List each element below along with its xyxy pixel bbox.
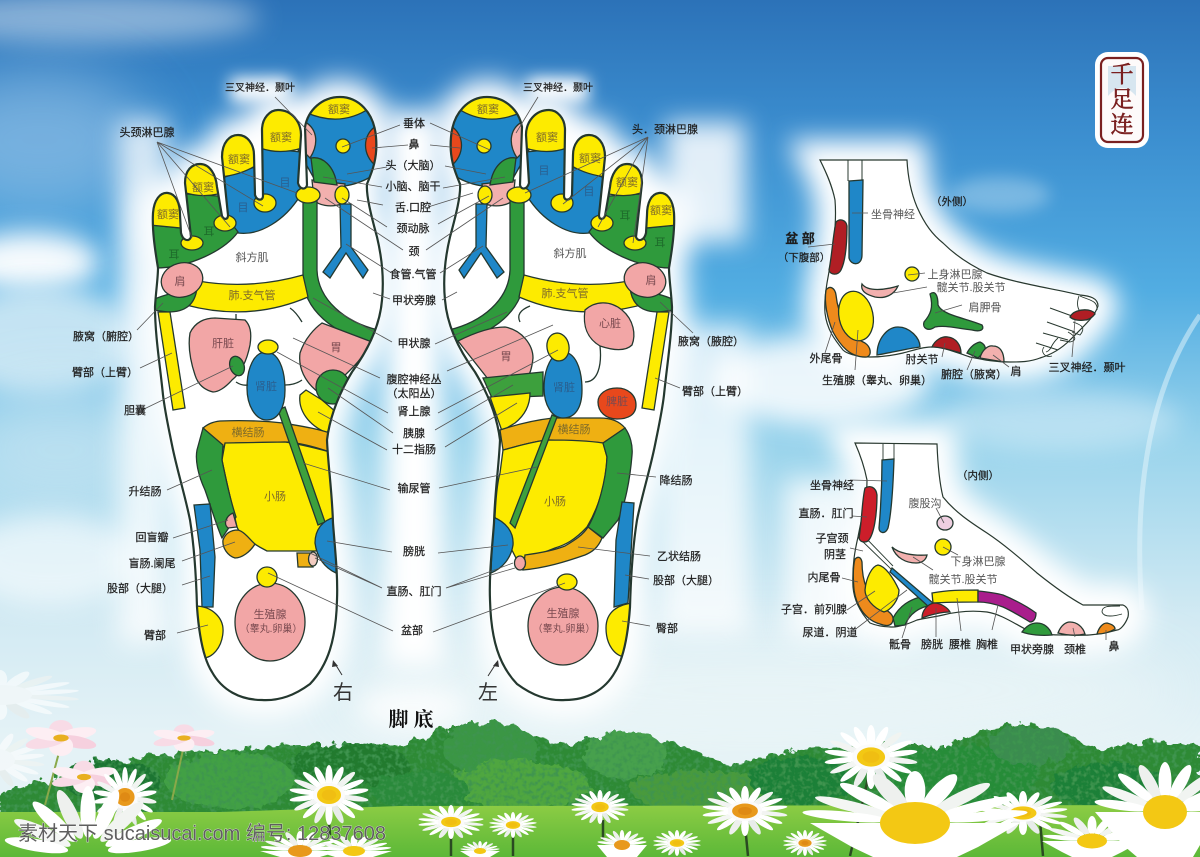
left foot organ labels: 目 [584, 186, 594, 198]
panel: left sole diagram [444, 88, 677, 700]
labels: sole diagrams: 鼻 [408, 137, 420, 151]
labels: sole diagrams: 甲状旁腺 [392, 293, 436, 307]
outer foot labels: （下腹部） [778, 251, 830, 264]
right foot organ labels: 耳 [204, 226, 214, 238]
labels: sole diagrams [72, 81, 748, 642]
right foot organ labels: 额窦 [192, 181, 214, 194]
inner foot leader lines [842, 480, 1106, 640]
labels: sole diagrams: 头（大脑） [386, 158, 440, 172]
labels: sole diagrams: 升结肠 [128, 485, 162, 498]
inner foot labels: 膀胱 [921, 637, 943, 651]
outer foot labels: 生殖腺（睾丸、卵巢） [822, 373, 932, 387]
labels: sole diagrams: 降结肠 [660, 473, 692, 487]
labels: sole diagrams: 胆囊 [124, 403, 146, 417]
left foot common zones [445, 88, 677, 657]
right foot organ labels: 目 [280, 177, 290, 189]
outer foot labels: 上身淋巴腺 [928, 267, 982, 281]
labels: sole diagrams: 回盲瓣 [136, 530, 168, 544]
outer foot zones [825, 180, 1095, 362]
labels: sole diagrams: 股部（大腿） [107, 581, 173, 595]
labels: sole diagrams: 食管.气管 [389, 267, 437, 281]
labels: sole diagrams: 臀部 [656, 621, 678, 635]
left foot organ labels: 额窦 [616, 176, 638, 189]
right foot organ labels: 肝脏 [212, 337, 234, 350]
label: right foot with arrow: 右 [333, 681, 353, 704]
right foot organ labels: （睾丸.卵巢） [240, 622, 302, 635]
label halo: inner foot left labels [785, 480, 855, 640]
left foot organ labels: 心脏 [599, 317, 621, 330]
left foot organ labels: 额窦 [477, 103, 499, 116]
left foot organ labels: 耳 [620, 210, 630, 222]
right foot organ labels: 肺.支气管 [228, 288, 276, 302]
labels: sole diagrams: 颈动脉 [396, 221, 430, 235]
labels: sole diagrams: 头颈淋巴腺 [120, 125, 174, 139]
labels: sole diagrams: 臂部 [144, 628, 166, 642]
outer foot labels: 坐骨神经 [871, 207, 915, 221]
tree line [0, 722, 1200, 820]
outer foot labels: （外侧） [931, 195, 973, 208]
label: left foot with arrow [478, 660, 499, 704]
inner foot labels: 髋关节.股关节 [928, 572, 998, 586]
inner foot labels: 坐骨神经 [810, 478, 854, 492]
white halo behind sole diagrams [118, 78, 750, 730]
label: right foot with arrow [332, 660, 353, 704]
labels: sole diagrams: 肾上腺 [398, 404, 430, 418]
right foot outline [153, 97, 383, 700]
labels: sole diagrams: 盲肠.阑尾 [128, 556, 176, 570]
inner foot labels: 颈椎 [1064, 642, 1086, 656]
inner foot labels: 骶骨 [889, 638, 911, 651]
outer foot labels: 腑腔（腋窝） [941, 367, 1007, 381]
outer foot labels: 三叉神经．颞叶 [1048, 360, 1126, 374]
right foot organ labels [157, 103, 350, 635]
labels: sole diagrams: 膀胱 [403, 544, 425, 558]
left foot organ labels: 横结肠 [558, 422, 590, 436]
right foot organ labels: 肩 [174, 274, 186, 288]
labels: sole diagrams: 乙状结肠 [657, 549, 701, 563]
right foot organ zones [150, 88, 382, 658]
labels: sole diagrams: 输尿管 [398, 481, 430, 495]
inner foot labels: 鼻 [1108, 639, 1120, 653]
labels: sole diagrams: 腋窝（腋腔） [678, 334, 744, 348]
inner foot labels: 甲状旁腺 [1010, 642, 1054, 656]
logo seal: 足 [1110, 87, 1134, 112]
right foot organ labels: 生殖腺 [254, 607, 286, 621]
left foot organ labels: 斜方肌 [554, 246, 586, 260]
inner foot labels: 腰椎 [949, 637, 971, 651]
left foot organ labels: 额窦 [650, 204, 672, 217]
outer foot leader lines [808, 213, 1075, 370]
outer foot labels: 外尾骨 [810, 352, 842, 365]
outer foot labels: 肩胛骨 [968, 300, 1002, 314]
left foot outline [444, 97, 674, 700]
panel: right sole diagram [150, 88, 383, 700]
inner foot labels: （内侧） [957, 469, 999, 482]
right foot organ labels: 斜方肌 [236, 250, 268, 264]
labels: sole diagrams: 臂部（上臂） [72, 365, 138, 379]
grass meadow [0, 805, 1200, 857]
flowers [0, 670, 1200, 857]
left foot organ labels: 额窦 [536, 131, 558, 144]
labels: sole diagrams: 垂体 [403, 116, 425, 130]
inner foot labels: 直肠．肛门 [798, 506, 854, 520]
labels: sole diagrams: （太阳丛） [386, 387, 442, 400]
labels: sole diagrams: 盆部 [401, 623, 423, 637]
labels: sole diagrams: 三叉神经．颞叶 [523, 81, 593, 94]
title: sole of foot: 脚 底 [388, 707, 434, 731]
left foot organ labels: 生殖腺 [546, 606, 580, 620]
panel: inner side of foot [781, 443, 1128, 656]
outer foot labels: 肘关节 [906, 352, 938, 366]
left foot organ labels: （睾丸.卵巢） [533, 622, 595, 635]
panel: outer side of foot [778, 160, 1126, 387]
right foot organ labels: 耳 [168, 249, 180, 261]
labels: sole diagrams: 腹腔神经丛 [386, 372, 442, 386]
inner foot labels: 下身淋巴腺 [950, 554, 1006, 568]
labels: sole diagrams: 三叉神经．颞叶 [225, 81, 295, 94]
inner foot labels: 腹股沟 [908, 496, 942, 510]
inner foot labels: 内尾骨 [808, 570, 840, 584]
outer foot labels: 肩 [1010, 364, 1022, 378]
logo seal [1095, 52, 1149, 148]
right foot organ labels: 额窦 [328, 103, 350, 116]
right foot organ labels: 小肠 [264, 490, 286, 503]
outer foot labels: 盆 部 [785, 231, 815, 246]
leader lines: sole diagrams [137, 97, 693, 633]
right foot organ labels: 目 [238, 202, 248, 214]
labels: sole diagrams: 头．颈淋巴腺 [632, 122, 698, 136]
labels: sole diagrams: 十二指肠 [392, 442, 436, 456]
inner foot labels: 胸椎 [976, 637, 998, 651]
right foot organ labels: 肾脏 [255, 380, 277, 393]
labels: sole diagrams: 腋窝（腑腔） [73, 329, 139, 343]
left foot organ labels: 肾脏 [553, 381, 575, 394]
labels: sole diagrams: 直肠、肛门 [386, 584, 442, 598]
left foot organ labels: 耳 [654, 237, 666, 249]
right foot organ labels: 额窦 [228, 153, 250, 166]
left foot organ labels [477, 103, 672, 635]
right foot organ labels: 额窦 [157, 208, 179, 221]
inner foot labels: 子宫．前列腺 [781, 602, 847, 616]
cosmos flowers [21, 720, 219, 805]
left foot organ labels: 胃 [500, 350, 512, 363]
labels: sole diagrams: 臂部（上臂） [682, 384, 748, 398]
left foot organ labels: 肩 [646, 273, 656, 287]
right foot organ labels: 胃 [330, 341, 342, 354]
labels: sole diagrams: 舌.口腔 [395, 200, 431, 214]
logo seal: 千 [1110, 62, 1134, 87]
labels: sole diagrams: 颈 [408, 245, 420, 258]
logo seal: 连 [1110, 112, 1134, 137]
inner foot labels: 子宫颈 [816, 531, 848, 545]
outer foot labels: 髋关节.股关节 [936, 280, 1006, 294]
inner foot outline [853, 443, 1128, 635]
left foot organ labels: 脾脏 [606, 394, 628, 408]
inner foot zones [853, 459, 1115, 635]
right foot organ labels: 横结肠 [232, 425, 264, 439]
labels: sole diagrams: 胰腺 [403, 426, 425, 440]
outer foot labels [778, 195, 1126, 387]
left foot organ labels: 额窦 [579, 152, 601, 165]
label: left foot with arrow: 左 [478, 681, 498, 704]
inner foot labels: 尿道．阴道 [802, 625, 858, 639]
right foot organ labels: 额窦 [270, 131, 292, 144]
left foot organ labels: 目 [538, 165, 550, 177]
labels: sole diagrams: 小脑、脑干 [386, 180, 440, 193]
faded daisies top left [0, 670, 80, 788]
labels: sole diagrams: 甲状腺 [398, 336, 430, 350]
watermark: 素材天下 sucaisucai.com 编号: 12837608 [18, 822, 386, 845]
left foot organ labels: 肺.支气管 [541, 286, 589, 300]
outer foot outline [820, 160, 1098, 362]
inner foot labels: 阴茎 [824, 548, 846, 561]
inner foot labels [781, 469, 1120, 656]
left foot organ labels: 小肠 [544, 495, 566, 508]
labels: sole diagrams: 股部（大腿） [653, 573, 719, 587]
